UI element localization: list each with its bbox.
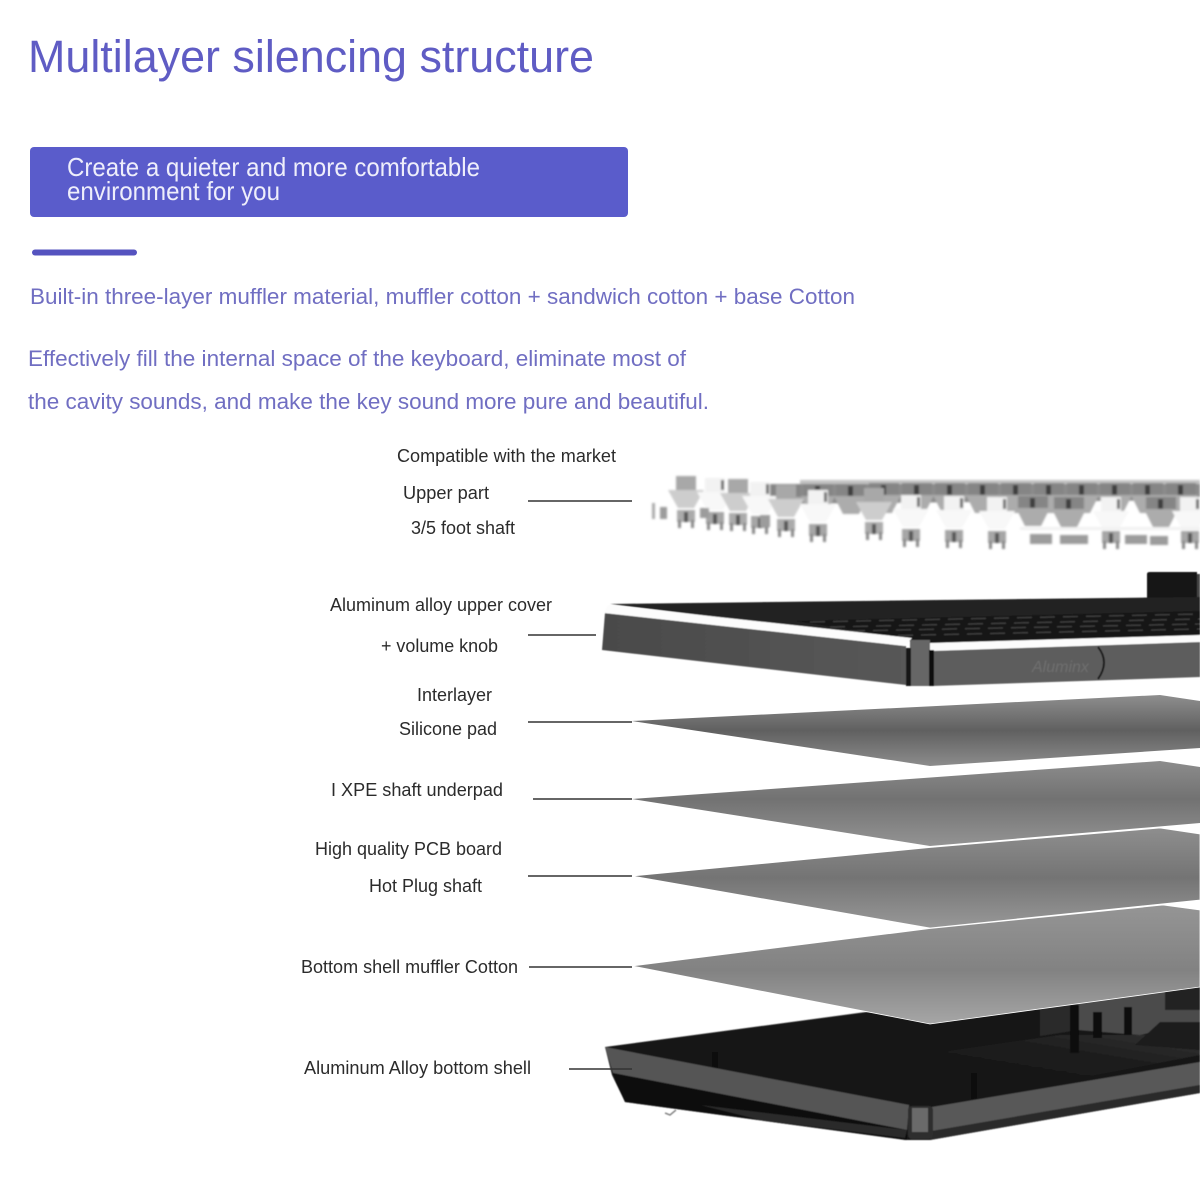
label: muffler cotton: Bottom shell muffler Cotton — [301, 957, 518, 977]
exploded layer: XPE underpad — [632, 761, 1200, 846]
description text: the cavity sounds, and make the key sound more pure and beautiful. — [28, 389, 709, 414]
title: Multilayer silencing structure — [28, 31, 594, 82]
exploded layer: muffler cotton — [632, 905, 1200, 1024]
front face right — [932, 642, 1200, 686]
front face left — [602, 613, 906, 685]
label: silicone pad: Silicone pad — [399, 719, 497, 739]
volume knob — [1147, 572, 1197, 602]
white edge left — [604, 605, 912, 646]
description text — [28, 284, 855, 414]
label: silicone pad: Interlayer — [417, 685, 492, 705]
label: bottom shell: Aluminum Alloy bottom shell — [304, 1058, 531, 1078]
accent rule — [32, 250, 137, 256]
label: XPE underpad: I XPE shaft underpad — [331, 780, 503, 800]
exploded layer: switches — [652, 476, 1200, 549]
label: upper cover: + volume knob — [381, 636, 498, 656]
exploded layer: silicone pad — [632, 695, 1200, 766]
exploded layer: aluminum upper cover with knob — [602, 572, 1200, 686]
exploded layer: PCB board — [632, 828, 1200, 928]
label: switches — [397, 446, 632, 538]
label: switches: Upper part — [403, 483, 489, 503]
label: switches: Compatible with the market — [397, 446, 616, 466]
description text: Effectively fill the internal space of the keyboard, eliminate most of — [28, 346, 687, 371]
label: switches: 3/5 foot shaft — [411, 518, 515, 538]
description text: Built-in three-layer muffler material, muffler cotton + sandwich cotton + base Cotton — [30, 284, 855, 309]
exploded layer: aluminum bottom shell — [605, 985, 1200, 1140]
label: PCB board: Hot Plug shaft — [369, 876, 482, 896]
white edge right — [930, 635, 1200, 651]
label: upper cover — [330, 595, 596, 656]
label: PCB board: High quality PCB board — [315, 839, 502, 859]
key plate — [795, 611, 1200, 642]
banner text: environment for you — [67, 176, 280, 206]
banner — [30, 147, 628, 217]
banner text: Create a quieter and more comfortable — [67, 152, 480, 182]
exploded layer: aluminum upper cover with knob: Aluminx — [1031, 659, 1090, 676]
label: PCB board — [315, 839, 632, 896]
label: silicone pad — [399, 685, 632, 739]
label: upper cover: Aluminum alloy upper cover — [330, 595, 552, 615]
